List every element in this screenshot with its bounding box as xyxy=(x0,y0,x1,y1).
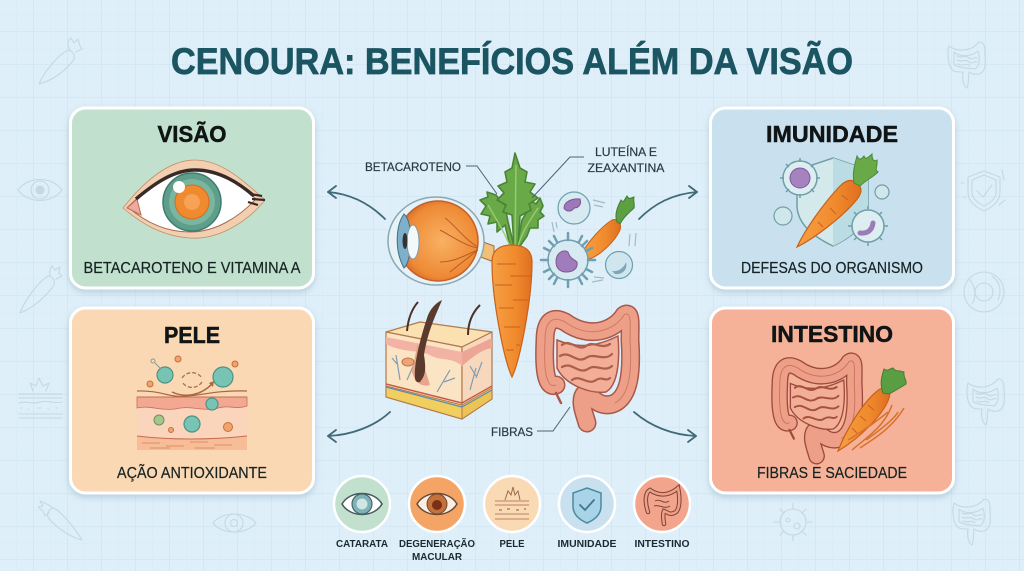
panel: pele xyxy=(70,308,314,493)
legend: pele xyxy=(484,476,540,550)
legend: catarata xyxy=(334,476,390,550)
icon: shield carrot cells xyxy=(774,154,889,247)
ghost intestine bottom right xyxy=(953,499,990,545)
legend: imunidade: IMUNIDADE xyxy=(558,538,616,550)
ghost eye left xyxy=(18,180,62,200)
card background xyxy=(70,108,314,288)
carrot root xyxy=(492,245,532,377)
ghost skin xyxy=(19,378,62,418)
central illustration: skin block xyxy=(386,300,492,419)
heading: INTESTINO xyxy=(771,321,893,347)
icon: intestine xyxy=(780,361,855,456)
legend: degeneração macular xyxy=(399,476,475,563)
ghost carrot bottom xyxy=(38,501,82,540)
legend: pele: PELE xyxy=(500,538,524,550)
legend: intestino xyxy=(634,476,690,550)
label: luteína e zeaxantina: ZEAXANTINA xyxy=(588,161,664,175)
heading: IMUNIDADE xyxy=(766,121,898,147)
carrot leaves xyxy=(480,153,544,246)
label: luteína e zeaxantina xyxy=(532,144,664,198)
central illustration: immune cells and carrot xyxy=(541,192,636,287)
title: CENOURA: BENEFÍCIOS ALÉM DA VISÃO xyxy=(171,40,853,82)
arrow: to imunidade xyxy=(639,186,697,219)
legend: imunidade xyxy=(558,476,616,550)
arrow: to pele xyxy=(328,412,390,442)
card background xyxy=(710,308,954,493)
caption: FIBRAS E SACIEDADE xyxy=(757,465,907,482)
ghost carrot left xyxy=(20,266,62,313)
panel: visão xyxy=(70,108,314,288)
legend: degeneração macular: DEGENERAÇÃO xyxy=(399,537,475,550)
panel: imunidade xyxy=(710,108,954,288)
caption: DEFESAS DO ORGANISMO xyxy=(741,260,923,277)
caption: AÇÃO ANTIOXIDANTE xyxy=(117,465,267,482)
ghost intestine right xyxy=(967,379,1004,425)
legend: intestino: INTESTINO xyxy=(634,538,690,550)
central illustration: intestine xyxy=(545,314,631,423)
central illustration: eye anatomy xyxy=(388,197,494,285)
label: betacaroteno: BETACAROTENO xyxy=(365,160,461,174)
ghost intestine top right xyxy=(948,42,985,88)
icon: carrot and fibres xyxy=(838,368,906,451)
arrow: to intestino xyxy=(634,412,696,442)
caption: BETACAROTENO E VITAMINA A xyxy=(84,260,301,277)
legend: catarata: CATARATA xyxy=(336,538,388,550)
icon: skin and antioxidants xyxy=(137,356,247,450)
card background xyxy=(710,108,954,288)
card background xyxy=(70,308,314,493)
label: fibras: FIBRAS xyxy=(491,425,533,439)
heading: VISÃO xyxy=(158,120,226,147)
icon: eye xyxy=(123,160,265,238)
ghost virus xyxy=(780,509,806,535)
central illustration: carrot xyxy=(480,153,544,377)
label: luteína e zeaxantina: LUTEÍNA E xyxy=(595,144,657,159)
arrow: to visão xyxy=(328,186,385,219)
panel: intestino xyxy=(710,308,954,493)
legend: degeneração macular: MACULAR xyxy=(412,551,462,563)
ghost carrot top left xyxy=(39,38,82,84)
ghost cell xyxy=(964,272,1004,312)
label: betacaroteno xyxy=(365,160,497,194)
label: fibras xyxy=(491,407,570,439)
ghost shield xyxy=(968,171,1000,211)
heading: PELE xyxy=(164,322,220,348)
ghost eye bottom xyxy=(213,514,256,532)
